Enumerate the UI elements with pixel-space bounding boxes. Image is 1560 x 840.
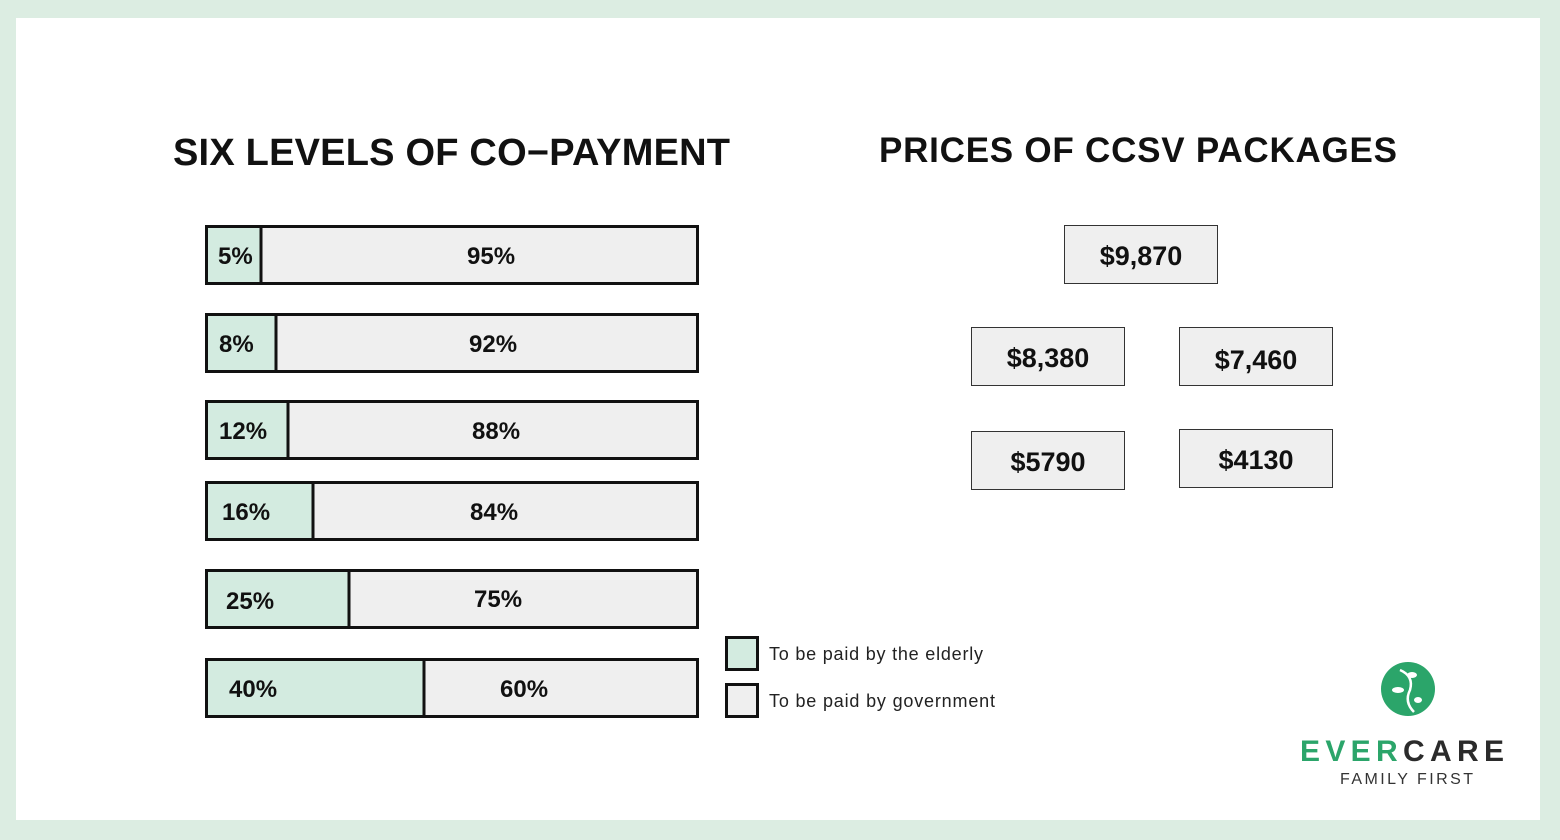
price 8380: $8,380: [1007, 343, 1089, 373]
price 7460: $7,460: [1215, 345, 1297, 375]
legend: elderly: [726, 638, 983, 670]
logo: evercare: [1300, 662, 1504, 788]
title: six levels: SIX LEVELS OF CO−PAYMENT: [173, 132, 730, 174]
price 9870: [1064, 226, 1218, 284]
bar 12/88: 12%: [219, 418, 267, 445]
logo text: EVERCARE: [1300, 735, 1504, 768]
price 4130: [1180, 430, 1332, 488]
price 4130: $4130: [1218, 445, 1294, 475]
bar 40/60: 40%: [229, 676, 277, 703]
bar 25/75: [206, 570, 698, 628]
bar 8/92: 92%: [469, 331, 517, 358]
price 8380: [972, 328, 1124, 386]
price 5790: $5790: [1010, 447, 1086, 477]
bar 12/88: [206, 402, 698, 458]
bar 5/95: 95%: [467, 243, 515, 270]
bar 12/88: 88%: [472, 418, 520, 445]
bar 16/84: 16%: [222, 499, 270, 526]
legend: elderly: To be paid by the elderly: [769, 644, 983, 664]
price 7460: [1180, 328, 1332, 386]
bar 40/60: 60%: [500, 676, 548, 703]
legend: government: To be paid by government: [769, 691, 995, 711]
bar 40/60: [206, 660, 698, 716]
bar 16/84: [206, 482, 698, 540]
bar 25/75: 25%: [226, 588, 274, 615]
legend: [726, 638, 995, 716]
tagline: FAMILY FIRST: [1340, 771, 1473, 788]
price 9870: $9,870: [1100, 241, 1182, 271]
bar 8/92: 8%: [219, 331, 254, 358]
icon: leaf circle: [1381, 662, 1435, 716]
bar 5/95: 5%: [218, 243, 253, 270]
bar chart: co-payment levels: [206, 226, 698, 716]
bar 5/95: [206, 226, 698, 284]
legend: government: [726, 684, 995, 716]
price boxes: [972, 226, 1332, 490]
bar 8/92: [206, 314, 698, 372]
bar 16/84: 84%: [470, 499, 518, 526]
title: prices: PRICES OF CCSV PACKAGES: [879, 131, 1397, 170]
bar 25/75: 75%: [474, 586, 522, 613]
price 5790: [972, 432, 1124, 490]
